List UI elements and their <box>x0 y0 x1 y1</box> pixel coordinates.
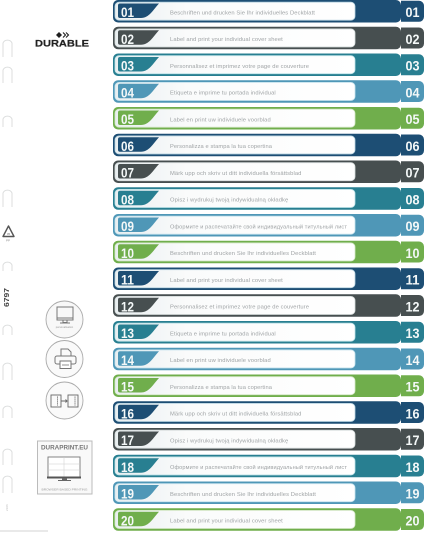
tab row 03: 03 <box>121 58 134 74</box>
tab row 20 <box>113 508 424 531</box>
tab row 07: 07 <box>406 164 420 180</box>
tab row 06: 06 <box>406 138 420 154</box>
tab row 06: 06 <box>121 138 134 154</box>
tab row 18: 18 <box>406 459 420 475</box>
tab row 11 <box>113 268 424 290</box>
tab row 09 <box>113 214 424 236</box>
tab row 15: 15 <box>406 378 420 394</box>
tab row 14: 14 <box>121 352 134 368</box>
tab row 09: 09 <box>121 218 134 234</box>
icon: computer <box>46 301 83 338</box>
tab row 10: Beschriften und drucken Sie Ihr individuelles Deckblatt <box>170 251 316 257</box>
recycling symbol: PP <box>6 238 10 242</box>
tab row 10 <box>113 241 424 263</box>
tab row 05: 05 <box>406 111 420 127</box>
recycling symbol <box>3 226 14 242</box>
duraprint.eu box: BROWSER BASED PRINTING <box>42 488 88 492</box>
small print code: 2106 <box>5 504 9 511</box>
tab row 10: 10 <box>406 245 420 261</box>
tab row 11: Label and print your individual cover sheet <box>170 278 283 284</box>
tab row 12: 12 <box>121 298 134 314</box>
tab row 12 <box>113 294 424 317</box>
tab row 11: 11 <box>406 272 420 288</box>
tab row 08: Opisz i wydrukuj twoją indywidualną okładkę <box>170 198 288 204</box>
tab row 16: Märk upp och skriv ut ditt individuella försättsblad <box>170 412 302 418</box>
tab row 04 <box>113 80 424 103</box>
brand logo: DURABLE: DURABLE <box>35 38 89 48</box>
icon: insert into device <box>46 382 83 419</box>
tab row 18 <box>113 455 424 477</box>
tab row 18: 18 <box>121 459 134 475</box>
tab row 01 <box>113 0 424 22</box>
icon: printer <box>46 340 83 378</box>
tab row 20: 20 <box>121 512 134 528</box>
tab row 18: Оформите и распечатайте свой индивидуальный титульный лист <box>170 464 347 471</box>
tab row 17 <box>113 428 424 450</box>
tab row 13: Etiqueta e imprime tu portada individual <box>170 331 276 337</box>
tab row 19: 19 <box>406 486 420 502</box>
tab row 05: Label en print uw individuele voorblad <box>170 117 271 123</box>
tab row 04: 04 <box>406 84 420 100</box>
sheet bottom edge <box>0 530 48 532</box>
tab row 15: Personalizza e stampa la tua copertina <box>170 385 273 391</box>
tab row 19: Beschriften und drucken Sie Ihr individuelles Deckblatt <box>170 492 316 498</box>
duraprint.eu box <box>38 441 92 494</box>
tab row 17: 17 <box>121 432 134 448</box>
tab row 05: 05 <box>121 111 134 127</box>
tab row 17: 17 <box>406 432 420 448</box>
tab row 14: 14 <box>406 352 420 368</box>
tab row 06: Personalizza e stampa la tua copertina <box>170 144 273 150</box>
tab row 19 <box>113 482 424 504</box>
tab row 20: 20 <box>406 512 420 528</box>
duraprint.eu box: DURAPRINT.EU <box>41 444 89 452</box>
tab row 03: 03 <box>406 58 420 74</box>
icon: computer: personalisation <box>56 325 74 329</box>
tab row 13: 13 <box>406 325 420 341</box>
tab row 12: Personnalisez et imprimez votre page de couverture <box>170 305 309 311</box>
tab row 01: 01 <box>121 4 134 20</box>
tab row 09: 09 <box>406 218 420 234</box>
tab row 09: Оформите и распечатайте свой индивидуальный титульный лист <box>170 223 347 230</box>
tab row 14: Label en print uw individuele voorblad <box>170 358 271 364</box>
tab row 19: 19 <box>121 486 134 502</box>
tab row 16: 16 <box>121 405 134 421</box>
tab row 08: 08 <box>406 191 420 207</box>
tab row 04: Etiqueta e imprime tu portada individual <box>170 91 276 97</box>
tab row 01: Beschriften und drucken Sie Ihr individuelles Deckblatt <box>170 10 315 16</box>
tab row 02: Label and print your individual cover sheet <box>170 37 283 43</box>
tab row 12: 12 <box>406 298 420 314</box>
tab row 07: Märk upp och skriv ut ditt individuella försättsblad <box>170 171 302 177</box>
tab row 13: 13 <box>121 325 134 341</box>
tab row 11: 11 <box>121 272 134 288</box>
tab row 16: 16 <box>406 405 420 421</box>
tab row 16 <box>113 401 424 424</box>
tab row 07 <box>113 160 424 183</box>
tab row 02: 02 <box>406 31 420 47</box>
punched binder holes <box>3 40 12 493</box>
tab row 14 <box>113 348 424 370</box>
tab row 17: Opisz i wydrukuj twoją indywidualną okładkę <box>170 438 288 444</box>
recycling symbol: 05 <box>7 232 10 236</box>
tab row 20: Label and print your individual cover sheet <box>170 519 283 525</box>
tab row 01: 01 <box>406 4 420 20</box>
tab row 10: 10 <box>121 245 134 261</box>
tab row 06 <box>113 134 424 156</box>
tab row 07: 07 <box>121 164 134 180</box>
tab row 08 <box>113 187 424 210</box>
tab row 08: 08 <box>121 191 134 207</box>
tab row 02 <box>113 27 424 49</box>
brand logo: DURABLE <box>35 32 89 48</box>
tab row 15 <box>113 374 424 397</box>
article number 6797: 6797 <box>4 288 11 307</box>
tab row 03 <box>113 54 424 76</box>
tab row 04: 04 <box>121 84 134 100</box>
tab row 03: Personnalisez et imprimez votre page de couverture <box>170 64 309 70</box>
tab row 13 <box>113 321 424 344</box>
tab row 02: 02 <box>121 31 134 47</box>
tab row 15: 15 <box>121 378 134 394</box>
tab row 05 <box>113 107 424 130</box>
